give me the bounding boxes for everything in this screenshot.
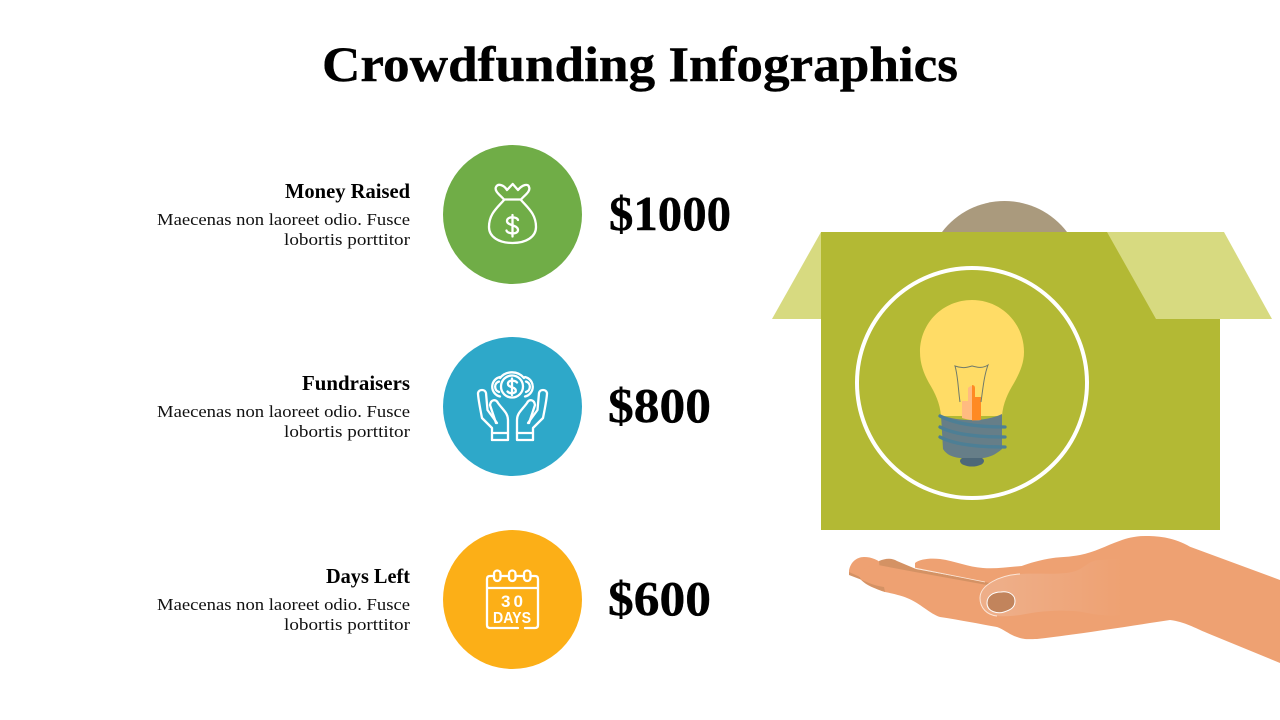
index finger — [860, 565, 997, 627]
title: Crowdfunding Infographics — [322, 36, 958, 92]
left flap — [772, 232, 821, 319]
thumb — [980, 559, 1123, 616]
icon: hands holding coins — [478, 372, 547, 440]
right flap — [1107, 232, 1272, 319]
brown sphere behind box — [942, 201, 1067, 232]
icon: calendar 30 days: DAYS — [493, 610, 531, 627]
illustration: open box with idea — [772, 201, 1272, 530]
value: $800: $800 — [608, 378, 711, 433]
green circle — [443, 145, 582, 284]
icon: calendar 30 days: 30 — [501, 592, 523, 611]
blue circle — [443, 337, 582, 476]
illustration: open hand — [849, 536, 1280, 663]
heading: fundraisers: Fundraisers — [302, 371, 410, 395]
heading: money raised: Money Raised — [285, 179, 410, 203]
text block: money raised description: lobortis porttitor — [284, 230, 410, 249]
value: $600: $600 — [608, 571, 711, 626]
value: $1000: $1000 — [609, 186, 731, 241]
index finger shadow — [860, 579, 885, 592]
text block: money raised description: Maecenas non laoreet odio. Fusce — [157, 210, 410, 229]
text block: days left description — [157, 595, 410, 634]
box body — [821, 232, 1220, 530]
text block: money raised description — [157, 210, 410, 249]
text block: fundraisers description — [157, 402, 410, 441]
text block: days left description: lobortis porttitor — [284, 615, 410, 634]
row: money raised — [157, 145, 731, 284]
row: days left — [157, 530, 711, 669]
row: fundraisers — [157, 337, 711, 476]
far finger shadow — [849, 572, 862, 580]
text block: fundraisers description: Maecenas non laoreet odio. Fusce — [157, 402, 410, 421]
text block: days left description: Maecenas non laoreet odio. Fusce — [157, 595, 410, 614]
thumb outline — [980, 574, 1020, 616]
heading: days left: Days Left — [326, 564, 410, 588]
finger highlight — [915, 568, 985, 582]
icon: light bulb — [920, 300, 1024, 466]
far finger — [849, 557, 884, 586]
text block: fundraisers description: lobortis porttitor — [284, 422, 410, 441]
hand and arm — [915, 536, 1280, 663]
thumbnail — [987, 592, 1015, 613]
orange circle — [443, 530, 582, 669]
icon: calendar 30 days — [487, 570, 538, 628]
icon: money bag — [489, 184, 536, 243]
middle finger shadow — [879, 559, 990, 590]
white ring — [857, 268, 1087, 498]
